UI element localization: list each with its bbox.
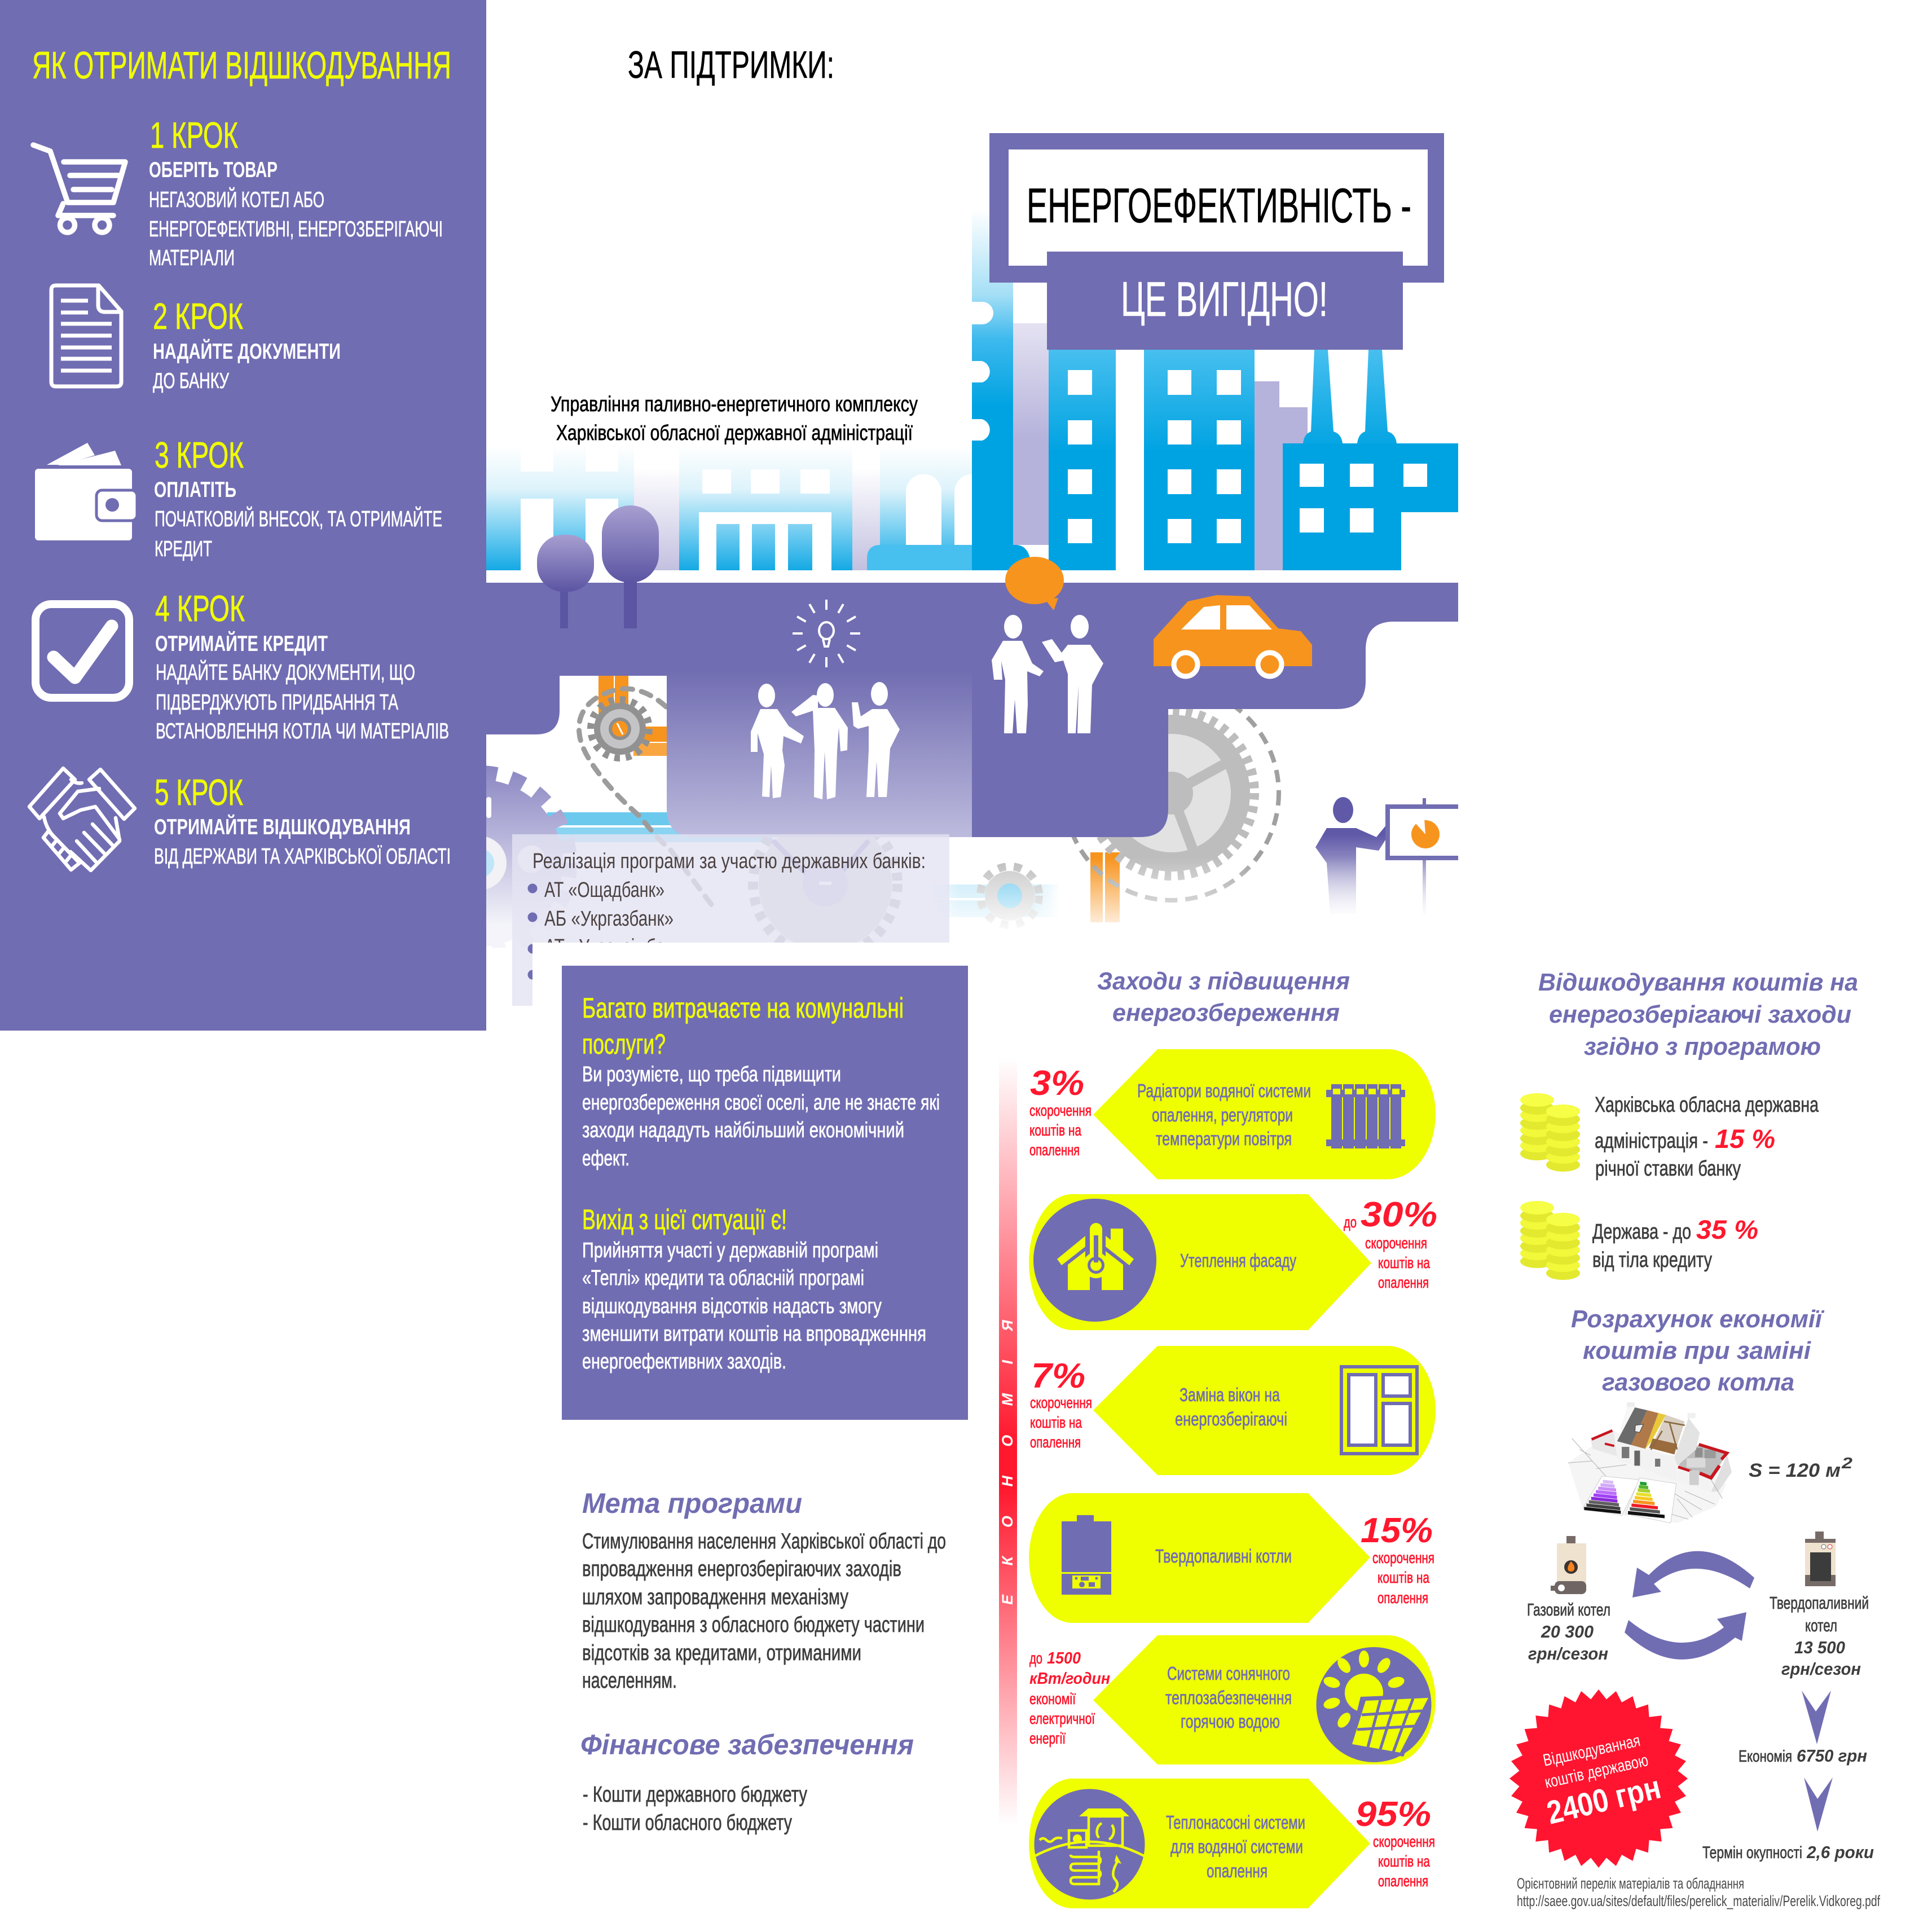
solid fuel boiler: Твердопаливний — [1770, 1593, 1869, 1613]
gas boiler — [1527, 1536, 1610, 1663]
panel: purple question box: ефект. — [582, 1147, 630, 1170]
trees — [537, 505, 659, 628]
heading: energy saving measures: енергозбереження — [1112, 999, 1340, 1027]
measure 6: heat pumps: опалення — [1207, 1860, 1268, 1881]
step 2: ДО БАНКУ — [153, 369, 229, 393]
stat: 3 percent: коштів на — [1029, 1121, 1081, 1139]
panel heading: ЯК ОТРИМАТИ ВІДШКОДУВАННЯ — [32, 44, 451, 87]
main title banner — [989, 133, 1444, 350]
panel: purple question box: послуги? — [582, 1028, 666, 1060]
lilac background building — [1013, 323, 1308, 570]
step 3: ОПЛАТІТЬ — [154, 478, 236, 502]
panel: participating banks: АБ «Укргазбанк» — [544, 907, 674, 931]
step 4: ОТРИМАЙТЕ КРЕДИТ — [155, 631, 328, 656]
stat: 1500 kWh: електричної — [1029, 1710, 1095, 1727]
measure 6: heat pumps — [1029, 1779, 1435, 1908]
stat: 3 percent: 3% — [1030, 1064, 1084, 1103]
faded left buildings — [486, 446, 1031, 570]
step 4: НАДАЙТЕ БАНКУ ДОКУМЕНТИ, ЩО — [156, 659, 415, 685]
icon: coins — [1520, 1093, 1580, 1172]
heading: compensation: згідно з програмою — [1584, 1033, 1821, 1060]
heading: savings calculation — [1571, 1305, 1825, 1396]
footer: source reference — [1517, 1875, 1880, 1909]
text block: financing: Фінансове забезпечення — [580, 1729, 914, 1761]
step 3: 3 КРОК — [155, 434, 244, 476]
stat: 7 percent: опалення — [1030, 1433, 1081, 1451]
step 1: МАТЕРІАЛИ — [149, 246, 235, 270]
stat: up to 30 percent: коштів на — [1378, 1254, 1430, 1271]
arrow: solid to gas — [1632, 1551, 1754, 1597]
text block: financing — [580, 1729, 914, 1835]
stat: 1500 kWh: до — [1029, 1649, 1042, 1667]
heading: compensation — [1538, 969, 1858, 1060]
step 3 — [35, 434, 442, 561]
icon: house with thermometer — [1033, 1199, 1156, 1322]
measure 1: radiators: Радіатори водяної системи — [1137, 1080, 1311, 1101]
panel: participating banks: АТ «Ощадбанк» — [544, 878, 664, 902]
compensation: state: від тіла кредиту — [1592, 1248, 1712, 1272]
heading: energy saving measures — [1097, 967, 1350, 1027]
icon: check box — [36, 604, 129, 698]
measure 3: windows: енергозберігаючі — [1175, 1409, 1287, 1429]
blue tower — [972, 218, 1030, 570]
step 1: ЕНЕРГОЕФЕКТИВНІ, ЕНЕРГОЗБЕРІГАЮЧІ — [149, 217, 443, 241]
dashed belt — [579, 689, 714, 908]
panel: purple question box: зменшити витрати коштів на впровадженння — [582, 1322, 926, 1346]
measure 4: solid fuel boilers — [1029, 1493, 1434, 1623]
solid fuel boiler: котел — [1805, 1616, 1837, 1635]
purple road band, left lobe — [486, 583, 667, 734]
economy gradient strip: ЕКОНОМІЯ — [999, 1319, 1016, 1605]
stat: 15 percent: коштів на — [1378, 1569, 1429, 1586]
measure 1: radiators — [1029, 1049, 1436, 1180]
stat: 95 percent: 95% — [1356, 1795, 1431, 1834]
stat: 1500 kWh: 1500 — [1047, 1649, 1081, 1667]
step 4 — [36, 588, 449, 743]
step 4: ПІДВЕРДЖУЮТЬ ПРИДБАННЯ ТА — [156, 690, 398, 715]
measure 2: facade insulation — [1029, 1194, 1437, 1330]
measure 2: facade insulation: Утеплення фасаду — [1180, 1250, 1296, 1271]
step 3: КРЕДИТ — [155, 537, 212, 561]
stat: 7 percent — [1030, 1357, 1092, 1451]
step 2: 2 КРОК — [153, 296, 243, 337]
organisation name: Управління паливно-енергетичного комплексу — [551, 393, 918, 416]
stat: 3 percent — [1029, 1064, 1092, 1159]
city scene illustration — [486, 218, 1458, 948]
heading: compensation: енергозберігаючі заходи — [1549, 1001, 1851, 1028]
ghost gear behind bank list — [753, 812, 897, 956]
arrow: gas to solid — [1625, 1612, 1746, 1660]
text block: programme goal: відсотків за кредитами, отриманими — [582, 1641, 861, 1665]
heading: savings calculation: коштів при заміні — [1583, 1337, 1811, 1365]
icon: shopping cart — [33, 145, 125, 232]
heading: savings calculation: газового котла — [1602, 1368, 1794, 1396]
economy gradient strip — [999, 1058, 1017, 1825]
step 4: 4 КРОК — [155, 588, 245, 629]
red stamp: compensation amount — [1495, 1675, 1702, 1882]
left lilac gear — [486, 765, 577, 948]
organisation name: Харківської обласної державної адміністрації — [556, 421, 913, 445]
stat: 3 percent: опалення — [1029, 1141, 1080, 1159]
measure 6: heat pumps: Теплонасосні системи — [1166, 1812, 1305, 1833]
white sheet covering lower page — [532, 943, 1932, 1932]
small left gear with orange pipes — [591, 676, 667, 758]
compensation: state — [1520, 1201, 1758, 1280]
solid fuel boiler: грн/сезон — [1781, 1659, 1861, 1679]
savings text: Економія — [1739, 1748, 1792, 1766]
heading: compensation: Відшкодування коштів на — [1538, 969, 1858, 996]
icon: boiler — [1062, 1515, 1111, 1595]
factory — [1283, 350, 1458, 570]
gas boiler: грн/сезон — [1528, 1644, 1608, 1663]
stat: 15 percent: опалення — [1378, 1589, 1428, 1607]
measure 1: radiators: опалення, регулятори — [1152, 1104, 1293, 1125]
stat: 7 percent: коштів на — [1030, 1414, 1082, 1431]
step 2: НАДАЙТЕ ДОКУМЕНТИ — [153, 338, 341, 364]
step 5: ВІД ДЕРЖАВИ ТА ХАРКІВСЬКОЇ ОБЛАСТІ — [154, 844, 451, 869]
step 1: ОБЕРІТЬ ТОВАР — [149, 158, 278, 182]
icon: light bulb — [793, 600, 860, 667]
main title banner: ЕНЕРГОЕФЕКТИВНІСТЬ - — [1027, 179, 1411, 233]
compensation: regional administration — [1520, 1093, 1819, 1181]
icon: radiator — [1326, 1084, 1405, 1148]
stat: 95 percent: скорочення — [1373, 1833, 1435, 1850]
stat: 15 percent: 15% — [1361, 1511, 1433, 1550]
icon: window — [1341, 1367, 1417, 1454]
panel: purple question box: Вихід з цієї ситуації є! — [582, 1204, 787, 1235]
measure 3: windows — [1030, 1346, 1436, 1475]
panel: purple question box: енергоефективних заходів. — [582, 1350, 786, 1374]
high-rise buildings — [1049, 338, 1255, 570]
solid fuel boiler: 13 500 — [1794, 1638, 1845, 1657]
stat: up to 30 percent — [1344, 1195, 1437, 1291]
icon: document — [51, 285, 121, 386]
step 1: НЕГАЗОВИЙ КОТЕЛ АБО — [149, 187, 324, 212]
small bottom gear — [980, 866, 1039, 925]
panel: purple question box: заходи нададуть найбільший економічний — [582, 1119, 904, 1142]
panel: participating banks — [512, 834, 949, 1006]
panel: purple question box: Ви розумієте, що треба підвищити — [582, 1063, 841, 1086]
measure 5: solar water heating — [1029, 1635, 1436, 1764]
footer: source reference: Орієнтовний перелік матеріалів та обладнання — [1517, 1875, 1744, 1892]
step 1: 1 КРОК — [150, 115, 238, 156]
text block: programme goal: відшкодування з обласного бюджету частини — [582, 1613, 925, 1637]
stat: up to 30 percent: до — [1344, 1213, 1357, 1231]
red stamp: compensation amount: 2400 грн — [1543, 1769, 1664, 1832]
measure 5: solar water heating: горячою водою — [1181, 1711, 1280, 1732]
icon: handshake — [29, 768, 135, 870]
savings text — [1739, 1746, 1867, 1766]
compensation: state: Держава - до — [1592, 1220, 1691, 1244]
icon: coins — [1520, 1201, 1580, 1280]
heading: energy saving measures: Заходи з підвищення — [1097, 967, 1350, 995]
panel: purple question box: енергозбереження своєї оселі, але не знаєте які — [582, 1091, 940, 1115]
savings text: 6750 грн — [1797, 1746, 1867, 1766]
panel: participating banks: АТ «Укрексімбанк» — [544, 935, 691, 959]
icon: wallet — [35, 443, 137, 540]
text block: programme goal: Стимулювання населення Харківської області до — [582, 1529, 946, 1553]
icon: heat pump — [1035, 1789, 1145, 1900]
icon: solid fuel boiler — [1805, 1531, 1836, 1586]
measure 1: radiators: температури повітря — [1156, 1128, 1292, 1149]
icon: three people — [751, 682, 900, 799]
purple road band, right part — [972, 583, 1458, 837]
stat: 1500 kWh: кВт/годин — [1029, 1670, 1110, 1688]
panel: how to get compensation — [0, 0, 486, 1031]
main title banner: ЦЕ ВИГІДНО! — [1121, 272, 1328, 327]
icon: gas boiler — [1551, 1536, 1586, 1594]
area label: S = 120 м — [1749, 1460, 1841, 1481]
compensation: regional administration: річної ставки банку — [1595, 1157, 1741, 1181]
text block: financing: - Кошти обласного бюджету — [583, 1811, 792, 1835]
stat: 1500 kWh: економії — [1029, 1690, 1076, 1707]
icon: sun and solar panel — [1317, 1647, 1432, 1762]
payback text: 2,6 роки — [1806, 1842, 1874, 1862]
stat: up to 30 percent: опалення — [1378, 1274, 1429, 1291]
area label: 2 — [1841, 1454, 1853, 1472]
gas boiler: 20 300 — [1541, 1622, 1594, 1641]
bottom fade — [949, 861, 1426, 929]
blue pipes — [547, 812, 1060, 917]
stat: 3 percent: скорочення — [1029, 1102, 1092, 1119]
panel: purple question box: відшкодування відсотків надасть змогу — [582, 1295, 882, 1318]
illustration: house with energy labels — [1568, 1402, 1732, 1523]
purple road band, centre part — [667, 583, 972, 837]
red stamp: compensation amount: Відшкодуванная — [1542, 1731, 1642, 1770]
step 1 — [33, 115, 443, 270]
presenter with chart — [1315, 797, 1458, 914]
compensation: regional administration: 15 % — [1715, 1124, 1775, 1154]
compensation: state: 35 % — [1696, 1214, 1758, 1244]
payback text: Термін окупності — [1702, 1843, 1802, 1862]
stat: 95 percent — [1356, 1795, 1435, 1890]
panel: purple question box: Прийняття участі у державній програмі — [582, 1239, 878, 1262]
step 5: ОТРИМАЙТЕ ВІДШКОДУВАННЯ — [154, 814, 411, 839]
compensation: regional administration: адміністрація - — [1595, 1129, 1708, 1153]
stat: 7 percent: 7% — [1031, 1357, 1085, 1396]
panel: purple question box — [562, 966, 968, 1420]
stat: 7 percent: скорочення — [1030, 1394, 1092, 1411]
stat: 15 percent: скорочення — [1372, 1549, 1434, 1566]
stat: 1500 kWh — [1029, 1649, 1110, 1747]
gas boiler: Газовий котел — [1527, 1600, 1610, 1619]
panel: purple question box: Багато витрачаєте на комунальні — [582, 992, 904, 1024]
title: support line: ЗА ПІДТРИМКИ: — [628, 43, 834, 86]
stat: 1500 kWh: енергії — [1029, 1729, 1066, 1747]
step 2 — [51, 285, 341, 393]
step 4: ВСТАНОВЛЕННЯ КОТЛА ЧИ МАТЕРІАЛІВ — [156, 719, 449, 743]
compensation: regional administration: Харківська обласна державна — [1595, 1093, 1819, 1117]
heading: savings calculation: Розрахунок економії — [1571, 1305, 1825, 1333]
step 3: ПОЧАТКОВИЙ ВНЕСОК, ТА ОТРИМАЙТЕ — [155, 506, 442, 531]
icon: speech bubble — [1005, 557, 1064, 610]
area label — [1749, 1454, 1853, 1481]
text block: financing: - Кошти державного бюджету — [583, 1783, 807, 1807]
step 5: 5 КРОК — [155, 772, 243, 813]
measure 6: heat pumps: для водяної системи — [1170, 1836, 1303, 1857]
red stamp: compensation amount: коштів державою — [1543, 1751, 1650, 1792]
stat: 15 percent — [1361, 1511, 1434, 1607]
icon: orange car — [1154, 595, 1312, 676]
measure 4: solid fuel boilers: Твердопаливні котли — [1155, 1546, 1292, 1566]
step 5 — [29, 768, 451, 870]
stat: up to 30 percent: 30% — [1361, 1195, 1437, 1234]
measure 5: solar water heating: Системи сонячного — [1167, 1663, 1290, 1684]
text block: programme goal — [582, 1487, 946, 1693]
icon: two people talking — [992, 615, 1103, 733]
solid fuel boiler — [1770, 1531, 1869, 1679]
organisation name — [551, 393, 918, 445]
arrow: down to savings — [1802, 1691, 1831, 1744]
panel: participating banks: Реалізація програми за участю державних банків: — [532, 850, 926, 873]
text block: programme goal: впровадження енергозберігаючих заходів — [582, 1557, 901, 1581]
measure 3: windows: Заміна вікон на — [1180, 1384, 1280, 1405]
panel: purple question box: «Теплі» кредити та обласній програмі — [582, 1266, 864, 1290]
text block: programme goal: Мета програми — [582, 1487, 802, 1519]
text block: programme goal: шляхом запровадження механізму — [582, 1585, 848, 1609]
arrow: down to payback — [1804, 1777, 1833, 1832]
text block: programme goal: населенням. — [582, 1669, 677, 1693]
measure 5: solar water heating: теплозабезпечення — [1165, 1687, 1292, 1708]
large grey gear — [1072, 709, 1281, 922]
stat: up to 30 percent: скорочення — [1365, 1234, 1427, 1252]
stat: 95 percent: коштів на — [1378, 1852, 1430, 1870]
stat: 95 percent: опалення — [1378, 1872, 1428, 1890]
